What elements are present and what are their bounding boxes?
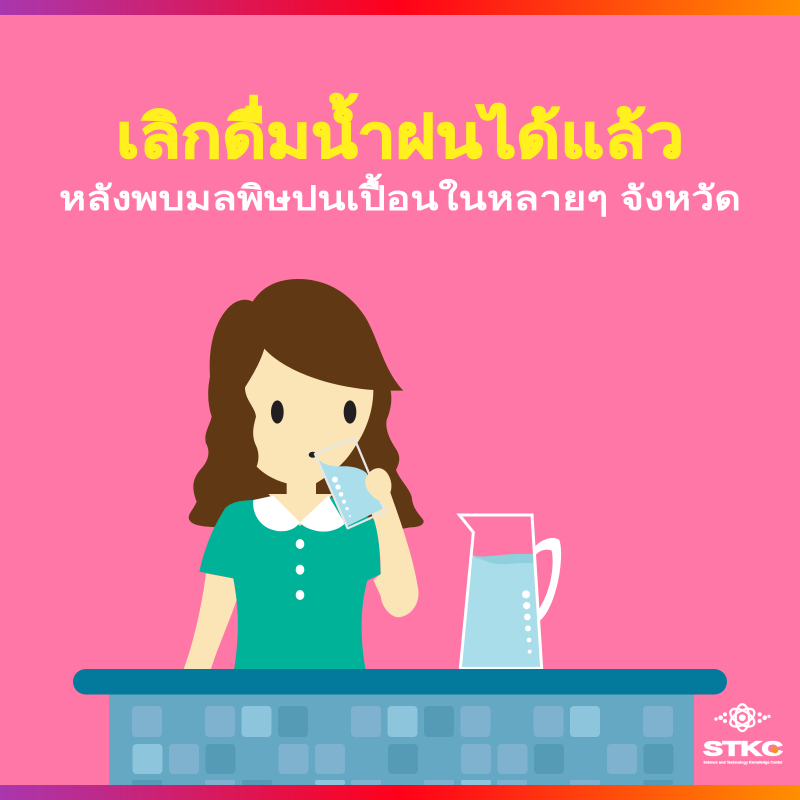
character: girl drinking water	[183, 279, 424, 670]
bottom gradient bar	[0, 785, 800, 800]
right arm	[370, 492, 419, 617]
logo dot	[772, 747, 778, 753]
logo: STKC	[703, 704, 783, 765]
jug water surface	[473, 554, 534, 564]
hair	[189, 279, 424, 532]
shirt buttons	[296, 539, 304, 600]
title: เลิกดื่มน้ำฝนได้แล้ว	[116, 93, 684, 170]
tile row 3	[132, 780, 673, 785]
jug outline	[459, 515, 542, 668]
logo wordmark: STKC	[703, 739, 783, 761]
hand	[365, 468, 391, 502]
desk top	[73, 669, 727, 694]
tile row 2	[132, 744, 674, 774]
jug handle	[535, 538, 561, 621]
left arm	[183, 573, 237, 670]
jug water	[461, 554, 541, 667]
desk body	[109, 690, 694, 786]
subtitle: หลังพบมลพิษปนเปื้อนในหลายๆ จังหวัด	[59, 173, 741, 218]
tile row 1	[132, 706, 673, 737]
logo tagline: Science and Technology Knowledge Center	[703, 760, 783, 765]
desk tiles	[132, 706, 674, 785]
white collar	[253, 496, 345, 532]
face and neck	[245, 349, 373, 526]
glass of water	[315, 438, 385, 528]
logo atom icon	[714, 704, 771, 731]
mouth	[309, 452, 317, 458]
water jug	[459, 515, 561, 668]
eyes	[271, 400, 356, 424]
top gradient bar	[0, 0, 800, 15]
jug bubbles	[522, 590, 532, 654]
green shirt	[199, 497, 381, 670]
